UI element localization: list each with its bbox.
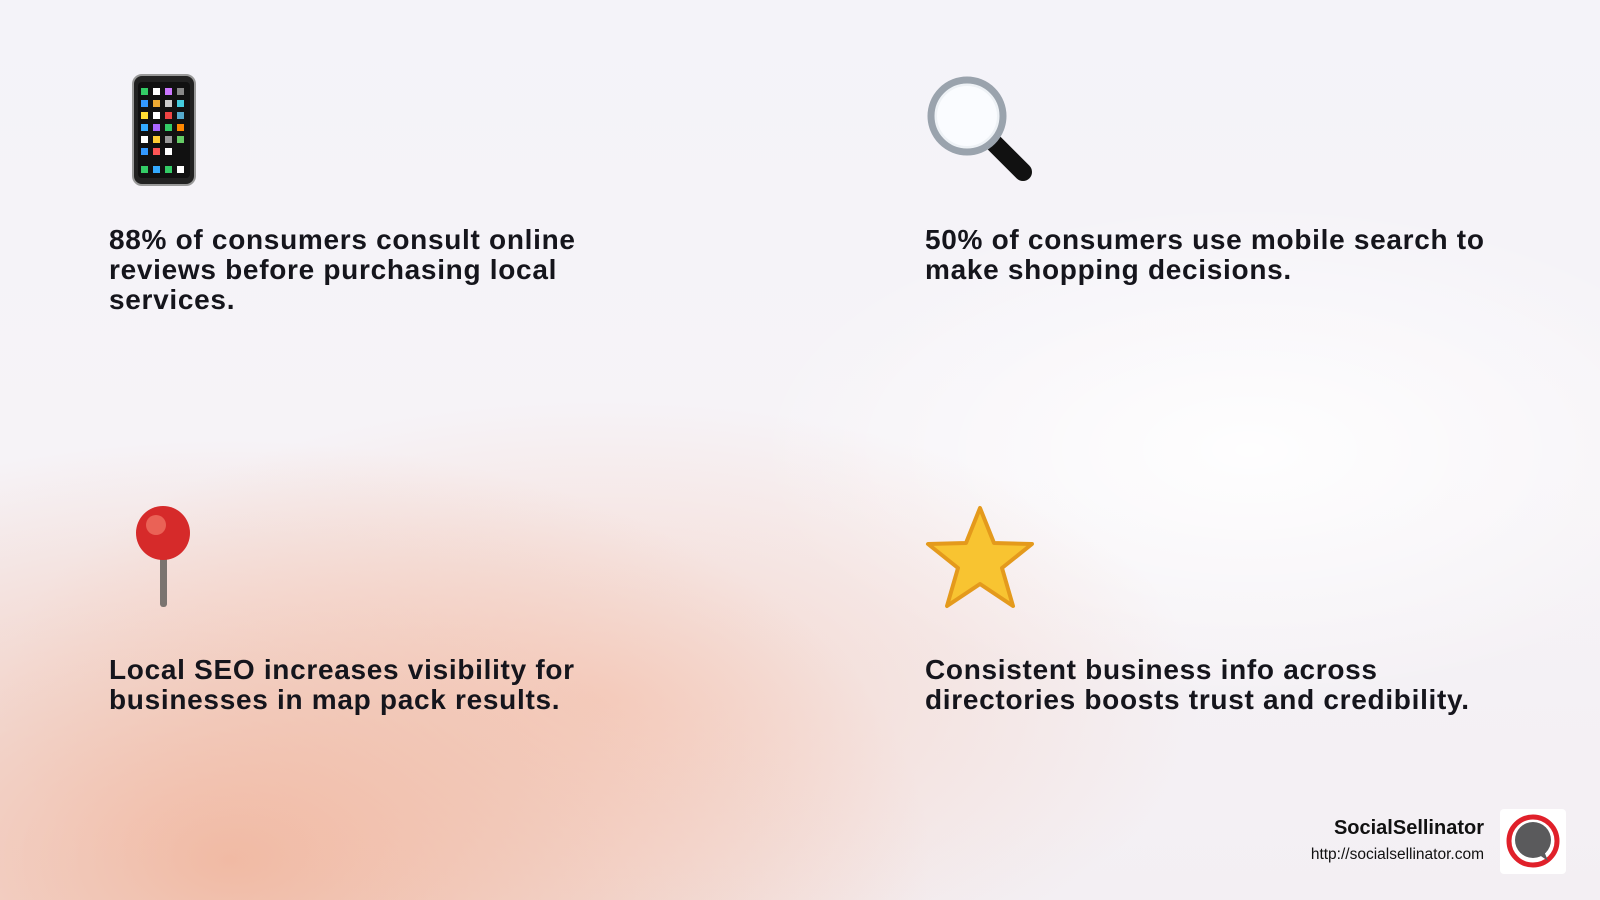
text: stat 4 <box>925 654 1470 715</box>
text: stat 3 <box>109 654 575 715</box>
logo <box>1500 809 1566 874</box>
icon: star <box>926 506 1034 608</box>
brand: SocialSellinator <box>1311 817 1484 863</box>
icon: magnifying glass <box>928 76 1032 181</box>
text: stat 1: 88% of consumers consult online <box>109 224 576 255</box>
text: stat 2: make shopping decisions. <box>925 254 1292 285</box>
text: stat 3: businesses in map pack results. <box>109 684 560 715</box>
text: stat 4: Consistent business info across <box>925 654 1378 685</box>
text: stat 1: services. <box>109 284 235 315</box>
text: stat 3: Local SEO increases visibility for <box>109 654 575 685</box>
text: stat 1 <box>109 224 576 315</box>
icon: mobile phone <box>132 74 196 186</box>
icon: round pushpin <box>136 506 190 607</box>
text: stat 1: reviews before purchasing local <box>109 254 557 285</box>
brand: SocialSellinator: http://socialsellinator.com <box>1311 846 1484 863</box>
brand: SocialSellinator: SocialSellinator <box>1334 817 1484 839</box>
text: stat 2: 50% of consumers use mobile search to <box>925 224 1485 255</box>
text: stat 2 <box>925 224 1485 285</box>
text: stat 4: directories boosts trust and credibility. <box>925 684 1470 715</box>
